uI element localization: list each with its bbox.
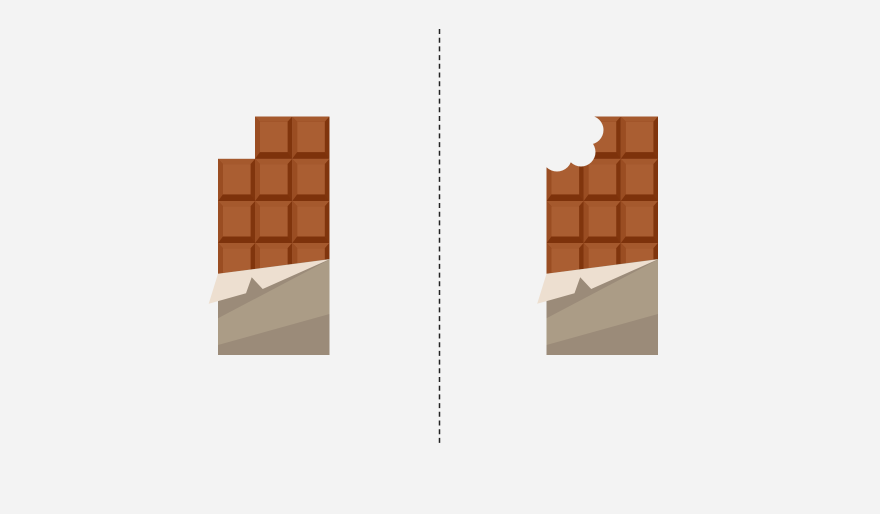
divider: dashed vertical line	[438, 29, 440, 444]
chocolate squares	[546, 117, 658, 285]
bite mark	[540, 110, 604, 172]
wrapper	[537, 259, 658, 355]
wrapper	[209, 259, 330, 355]
right chocolate bar: bitten corner	[537, 110, 658, 355]
chocolate squares	[218, 117, 329, 285]
left chocolate bar: two-thirds of a row missing	[209, 117, 330, 355]
